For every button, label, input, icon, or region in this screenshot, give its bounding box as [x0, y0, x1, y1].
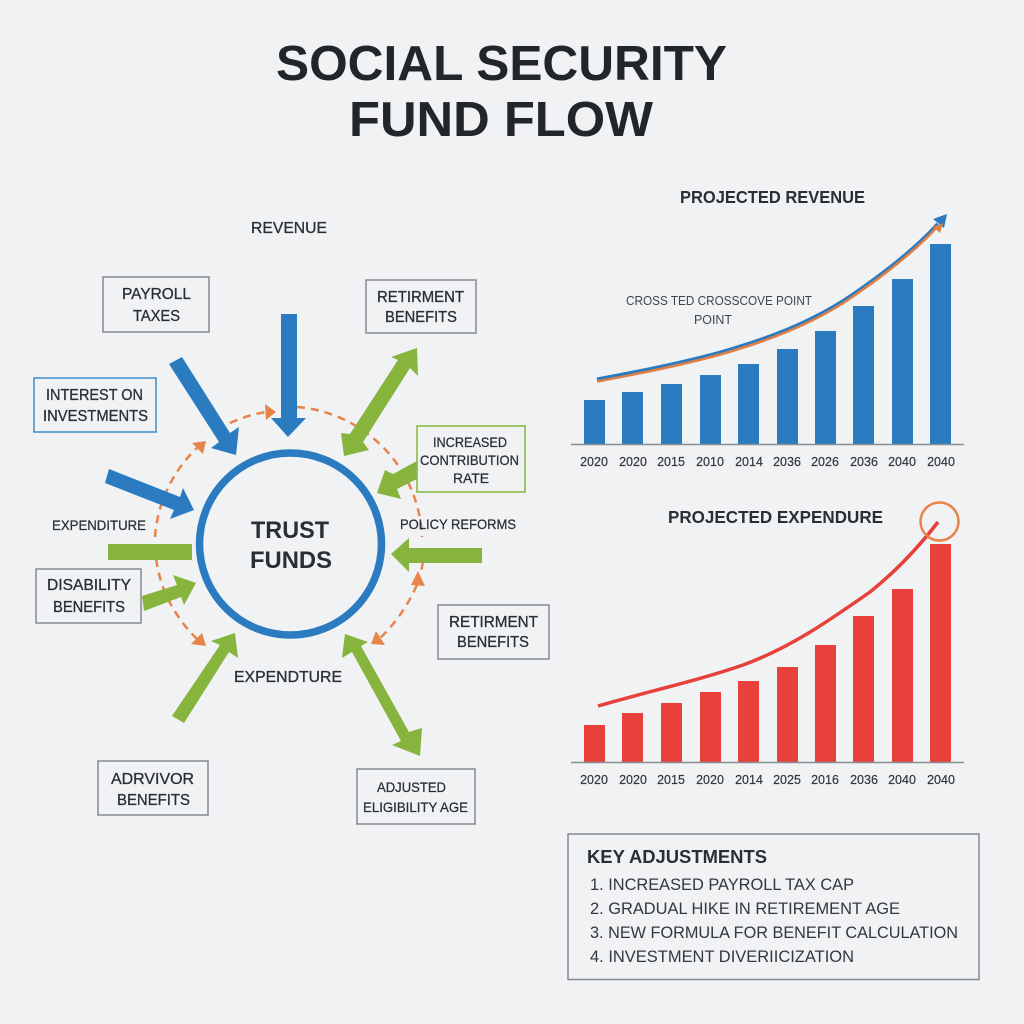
label: disability benefits: DISABILITY	[47, 577, 131, 594]
label: adjusted eligibility age: ELIGIBILITY AGE	[363, 799, 468, 815]
highlight circle	[920, 502, 958, 540]
revenue bars	[584, 244, 951, 444]
title: SOCIAL SECURITY	[276, 37, 727, 91]
blue arrow: top revenue	[271, 314, 306, 437]
trust funds circle	[200, 453, 382, 635]
years: 2020	[580, 773, 608, 787]
green arrow: policy reforms	[391, 538, 482, 572]
label: disability benefits	[36, 569, 141, 623]
axis	[571, 762, 964, 764]
revenue trend lines	[597, 214, 947, 382]
green bar: expenditure	[108, 544, 192, 560]
expenditure trend line	[598, 522, 938, 706]
label: payroll taxes	[103, 277, 209, 332]
panel: key adjustments: 3. NEW FORMULA FOR BENEFIT CALCULATION	[590, 924, 958, 942]
years: 2015	[657, 455, 685, 469]
chart heading: PROJECTED REVENUE	[680, 187, 865, 207]
expenditure bars	[584, 544, 951, 762]
years: 2010	[696, 455, 724, 469]
years: 2026	[811, 455, 839, 469]
years: 2016	[811, 773, 839, 787]
years: 2040	[888, 773, 916, 787]
label: adjusted eligibility age	[357, 769, 475, 824]
label: increased contribution rate: INCREASED	[433, 434, 507, 450]
years: 2014	[735, 455, 763, 469]
label: increased contribution rate: CONTRIBUTION	[420, 452, 519, 468]
years: 2040	[927, 455, 955, 469]
green arrow: disability	[142, 575, 196, 611]
label: interest on investments: INVESTMENTS	[43, 408, 148, 425]
label: survivor benefits: ADRVIVOR	[111, 771, 194, 788]
chart heading: PROJECTED EXPENDURE	[668, 507, 883, 527]
years: 2036	[773, 455, 801, 469]
panel: key adjustments: 2. GRADUAL HIKE IN RETIREMENT AGE	[590, 900, 900, 918]
years: 2036	[850, 455, 878, 469]
label: expenditure left: EXPENDITURE	[52, 517, 146, 533]
blue arrow: interest	[105, 469, 194, 519]
green arrow: contribution rate	[377, 461, 417, 499]
trust funds circle: TRUST	[251, 517, 329, 544]
label: retirement benefits lower: BENEFITS	[457, 634, 529, 651]
title: FUND FLOW	[349, 93, 654, 147]
label: expenditure bottom: EXPENDTURE	[234, 669, 342, 686]
panel: key adjustments: KEY ADJUSTMENTS	[587, 846, 767, 867]
years: 2020	[580, 455, 608, 469]
label: retirement benefits top: BENEFITS	[385, 309, 457, 326]
label: payroll taxes: PAYROLL	[122, 286, 191, 303]
years: 2020	[619, 455, 647, 469]
years: 2040	[927, 773, 955, 787]
years: 2040	[888, 455, 916, 469]
label: increased contribution rate	[417, 426, 525, 492]
green arrow: survivor	[172, 633, 238, 723]
label: adjusted eligibility age: ADJUSTED	[377, 779, 446, 795]
green arrow: adjusted age	[342, 634, 422, 756]
chart: projected expenditure	[571, 502, 964, 787]
label: increased contribution rate: RATE	[453, 470, 489, 486]
label: survivor benefits	[98, 761, 208, 815]
years: 2036	[850, 773, 878, 787]
crossover label: POINT	[694, 312, 732, 327]
green arrow: retirement top	[341, 348, 418, 456]
label: retirement benefits top: RETIRMENT	[377, 289, 464, 306]
label: payroll taxes: TAXES	[133, 308, 180, 325]
label: policy reforms: POLICY REFORMS	[400, 516, 516, 532]
crossover label	[626, 293, 812, 327]
axis	[571, 444, 964, 446]
panel: key adjustments	[568, 834, 979, 980]
years: 2014	[735, 773, 763, 787]
panel: key adjustments: 1. INCREASED PAYROLL TAX CAP	[590, 876, 854, 894]
years: 2020	[696, 773, 724, 787]
chart: projected revenue	[571, 187, 964, 469]
title	[276, 37, 727, 147]
dashed orange ring	[155, 404, 425, 646]
blue arrow: payroll taxes	[169, 357, 239, 455]
years: 2020	[619, 773, 647, 787]
label: retirement benefits top	[366, 280, 476, 333]
label: survivor benefits: BENEFITS	[117, 792, 190, 809]
label: interest on investments	[34, 378, 156, 432]
panel: key adjustments: 4. INVESTMENT DIVERIICIZATION	[590, 948, 854, 966]
years: 2025	[773, 773, 801, 787]
years	[580, 773, 955, 787]
label: retirement benefits lower	[438, 605, 549, 659]
years: 2015	[657, 773, 685, 787]
heading: revenue: REVENUE	[251, 220, 327, 237]
label: disability benefits: BENEFITS	[53, 599, 125, 616]
crossover label: CROSS TED CROSSCOVE POINT	[626, 293, 812, 308]
trust funds circle: FUNDS	[250, 547, 332, 574]
label: retirement benefits lower: RETIRMENT	[449, 614, 538, 631]
label: interest on investments: INTEREST ON	[46, 387, 143, 404]
years	[580, 455, 955, 469]
